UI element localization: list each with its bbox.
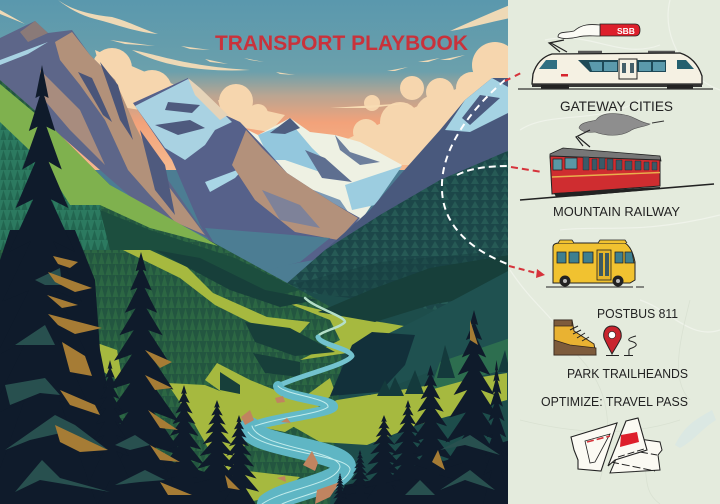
label: mountain railway: MOUNTAIN RAILWAY — [553, 204, 680, 219]
red dashed connector: gateway — [505, 72, 523, 81]
route lines — [442, 72, 545, 278]
white dashed branch — [457, 166, 508, 175]
red SBB banner: SBB — [617, 26, 635, 36]
icon: travel pass tickets — [571, 418, 662, 473]
panel: map sidebar — [508, 0, 720, 504]
panel: mountain valley illustration — [0, 0, 518, 504]
red SBB banner — [600, 24, 640, 36]
label: gateway cities: GATEWAY CITIES — [560, 98, 673, 114]
snowy peak: center — [133, 78, 360, 278]
title: TRANSPORT PLAYBOOK — [215, 32, 468, 55]
icon: trail marker — [624, 336, 636, 356]
wispy clouds — [0, 0, 510, 75]
snowy peak: right — [238, 118, 402, 225]
icon: mountain railway train — [520, 114, 714, 200]
cliff mountain: left — [0, 21, 208, 238]
red dashed connector: railway — [511, 167, 542, 172]
forest right of river — [330, 270, 510, 396]
label: park trailheands: PARK TRAILHEANDS — [567, 366, 688, 381]
sky — [0, 0, 510, 170]
river — [248, 298, 352, 504]
dark valley tree rows — [155, 250, 510, 394]
icon: postbus — [546, 240, 644, 287]
foreground trees — [0, 65, 510, 504]
icon: map pin — [604, 326, 621, 356]
cumulus clouds — [92, 42, 518, 165]
tree foliage highlights: teal — [5, 268, 500, 495]
red dashed arrow: bus — [509, 266, 545, 278]
icon: SBB train — [518, 24, 713, 89]
white dashed route — [442, 80, 510, 265]
left green slope — [0, 80, 345, 504]
label: optimize travel pass: OPTIMIZE: TRAVEL PASS — [541, 394, 688, 409]
river rocks — [241, 396, 340, 504]
forested mountain: right — [285, 78, 510, 504]
tree foliage highlights: brown — [47, 256, 478, 495]
meadows — [80, 250, 507, 504]
smoke — [579, 114, 650, 135]
icon: hiking boot — [554, 320, 596, 355]
label: postbus 811: POSTBUS 811 — [597, 306, 678, 321]
